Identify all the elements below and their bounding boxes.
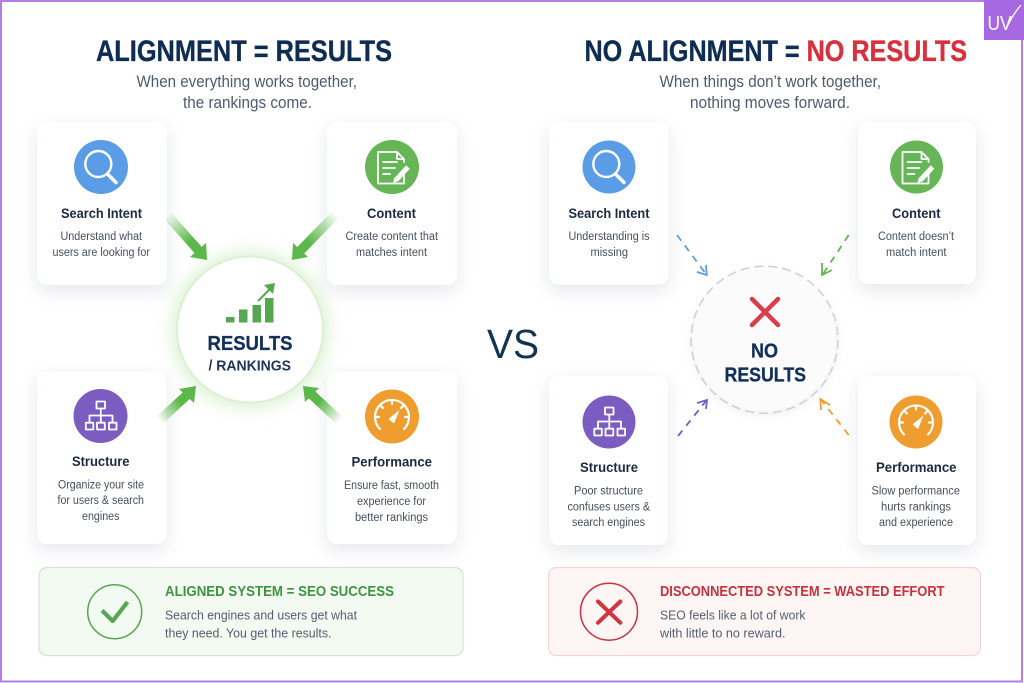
- callout: disconnected system: [548, 568, 980, 656]
- arrow: search intent to results: [168, 216, 207, 260]
- card: search intent (misaligned): Search Intent: [568, 205, 650, 221]
- callout: aligned system: ALIGNED SYSTEM = SEO SUCCESS: [165, 584, 394, 600]
- card: structure (aligned): engines: [82, 511, 120, 523]
- card: performance (aligned): better rankings: [355, 512, 428, 524]
- icon: document and pencil: [365, 140, 419, 194]
- callout: disconnected system: with little to no reward.: [659, 626, 786, 640]
- card: search intent (aligned): Search Intent: [61, 205, 142, 221]
- dashed arrow: performance: [820, 399, 849, 435]
- icon: rising bars: [226, 283, 275, 322]
- center circle: results / rankings: RESULTS: [208, 333, 292, 355]
- icon: sitemap: [582, 396, 636, 448]
- card: performance (misaligned): and experience: [879, 517, 953, 529]
- arrow: content to results: [292, 215, 335, 260]
- card: content (misaligned): Content: [892, 205, 941, 221]
- right subheading: nothing moves forward.: [690, 94, 850, 112]
- callout: disconnected system: SEO feels like a lot of work: [660, 608, 806, 622]
- arrow: structure to results: [160, 386, 196, 420]
- icon: red cross: [752, 299, 778, 325]
- icon: gauge: [890, 396, 942, 448]
- card: search intent (misaligned): [549, 122, 668, 284]
- card: content (aligned): matches intent: [356, 247, 428, 259]
- left subheading: [136, 73, 357, 112]
- center circle: no results: [691, 266, 838, 413]
- center circle: no results: RESULTS: [724, 364, 806, 386]
- card: performance (misaligned): [858, 376, 976, 545]
- right subheading: [660, 73, 881, 112]
- card: search intent (aligned): Understand what: [60, 231, 143, 243]
- card: structure (aligned): [37, 371, 166, 544]
- center circle: results / rankings: / RANKINGS: [208, 358, 291, 374]
- card: performance (misaligned): Slow performance: [872, 486, 960, 498]
- card: content (misaligned): match intent: [886, 247, 947, 259]
- card: performance (misaligned): Performance: [876, 459, 957, 475]
- card: performance (aligned): experience for: [357, 496, 426, 508]
- callout: aligned system: they need. You get the results.: [165, 626, 332, 640]
- callout: aligned system: [39, 568, 463, 656]
- card: structure (misaligned): search engines: [572, 517, 645, 529]
- left subheading: When everything works together,: [136, 73, 357, 91]
- center circle: no results: NO: [751, 340, 778, 362]
- icon: cross mark: [580, 583, 638, 640]
- dashed arrow: structure: [678, 400, 707, 436]
- card: structure (aligned): for users & search: [58, 495, 144, 507]
- right heading: NO ALIGNMENT = NO RESULTS: [584, 35, 967, 68]
- dashed arrow: content: [822, 235, 849, 275]
- icon: magnifier: [74, 140, 128, 194]
- card: search intent (misaligned): Understanding is: [568, 231, 650, 243]
- card: content (misaligned): [858, 122, 976, 284]
- callout: aligned system: Search engines and users get what: [165, 608, 357, 622]
- icon: document and pencil: [890, 140, 943, 194]
- left subheading: the rankings come.: [183, 94, 312, 112]
- card: structure (aligned): Organize your site: [58, 480, 144, 492]
- dashed arrow: search intent: [677, 235, 707, 275]
- center circle: results / rankings: [173, 253, 327, 407]
- card: content (aligned): [327, 122, 457, 285]
- card: structure (misaligned): [549, 376, 668, 545]
- card: search intent (aligned): users are looking for: [52, 247, 150, 259]
- card: performance (aligned): Ensure fast, smooth: [344, 480, 439, 492]
- card: search intent (aligned): [37, 122, 167, 285]
- card: content (aligned): Create content that: [346, 231, 439, 243]
- icon: magnifier: [582, 140, 636, 194]
- badge: UV logo: [984, 0, 1024, 40]
- right subheading: When things don’t work together,: [660, 73, 881, 91]
- card: performance (misaligned): hurts rankings: [881, 502, 951, 514]
- card: content (misaligned): Content doesn’t: [878, 231, 955, 243]
- icon: sitemap: [74, 389, 128, 443]
- badge: UV logo: UV: [988, 13, 1012, 35]
- card: structure (aligned): Structure: [72, 453, 130, 469]
- left heading: ALIGNMENT = RESULTS: [96, 35, 392, 68]
- icon: check mark: [88, 585, 142, 639]
- icon: gauge: [365, 390, 419, 444]
- card: search intent (misaligned): missing: [590, 247, 628, 259]
- card: structure (misaligned): Poor structure: [574, 486, 643, 498]
- arrow: performance to results: [303, 386, 339, 420]
- callout: disconnected system: DISCONNECTED SYSTEM = WASTED EFFORT: [660, 584, 945, 600]
- card: performance (aligned): [327, 371, 457, 544]
- card: structure (misaligned): confuses users &: [568, 502, 650, 514]
- card: structure (misaligned): Structure: [580, 459, 638, 475]
- card: content (aligned): Content: [367, 205, 416, 221]
- card: performance (aligned): Performance: [352, 454, 432, 470]
- VS label: VS: [487, 321, 539, 367]
